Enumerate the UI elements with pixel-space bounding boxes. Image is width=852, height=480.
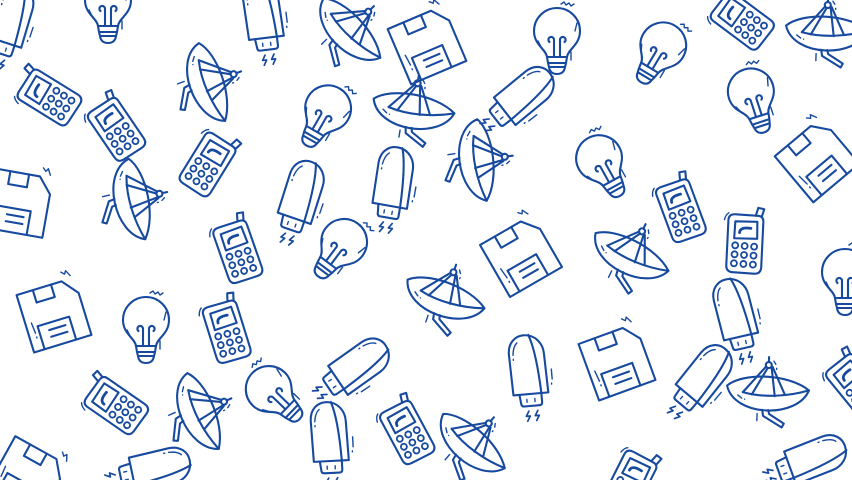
satellite dish 2 — [295, 0, 403, 85]
usb drive 9 — [658, 338, 744, 431]
usb drive 8 — [710, 274, 769, 367]
bulb 8 — [822, 243, 852, 315]
bulb 7 — [300, 205, 380, 290]
bulb 3 — [534, 2, 580, 74]
phone 8 — [648, 170, 707, 245]
usb drive 11 — [102, 444, 195, 480]
floppy disk 6 — [769, 111, 852, 202]
bulb 2 — [287, 72, 362, 157]
phone 2 — [78, 89, 148, 166]
floppy disk 4 — [14, 269, 91, 352]
bulb 9 — [123, 291, 169, 363]
floppy disk 3 — [0, 159, 54, 238]
usb drive 3 — [472, 60, 565, 146]
phone 7 — [371, 392, 437, 468]
phone 11 — [816, 345, 852, 422]
phone 12 — [597, 440, 663, 480]
satellite dish 5 — [90, 152, 176, 248]
usb drive 10 — [310, 401, 355, 480]
phone 3 — [173, 122, 243, 199]
satellite dish 8 — [151, 361, 248, 464]
bulb 10 — [232, 352, 316, 435]
satellite dish 3 — [367, 69, 459, 151]
bulb 4 — [621, 9, 698, 94]
phone 4 — [206, 211, 264, 286]
satellite dish 6 — [578, 206, 682, 305]
phone 9 — [721, 206, 765, 274]
usb drive 5 — [367, 145, 422, 236]
floppy disk 7 — [0, 428, 72, 480]
usb drive 6 — [305, 332, 400, 414]
phone 5 — [195, 291, 252, 366]
satellite dish 1 — [161, 33, 255, 134]
usb drive 4 — [268, 156, 335, 251]
phone 1 — [7, 62, 84, 132]
usb drive 2 — [241, 0, 292, 67]
phone 10 — [700, 0, 776, 56]
floppy disk 5 — [575, 315, 655, 400]
satellite dish 11 — [785, 0, 852, 68]
usb drive 7 — [507, 333, 556, 422]
bulb 5 — [720, 57, 786, 139]
bulb 6 — [565, 122, 640, 207]
bulb 1 — [85, 0, 131, 43]
satellite dish 4 — [438, 115, 518, 206]
floppy disk 2 — [476, 207, 562, 297]
satellite dish 10 — [726, 356, 810, 428]
satellite dish 9 — [418, 391, 525, 480]
usb drive 12 — [758, 430, 852, 480]
satellite dish 7 — [395, 251, 495, 344]
floppy disk 1 — [384, 0, 466, 84]
usb drive 1 — [0, 0, 44, 75]
phone 6 — [74, 369, 150, 441]
